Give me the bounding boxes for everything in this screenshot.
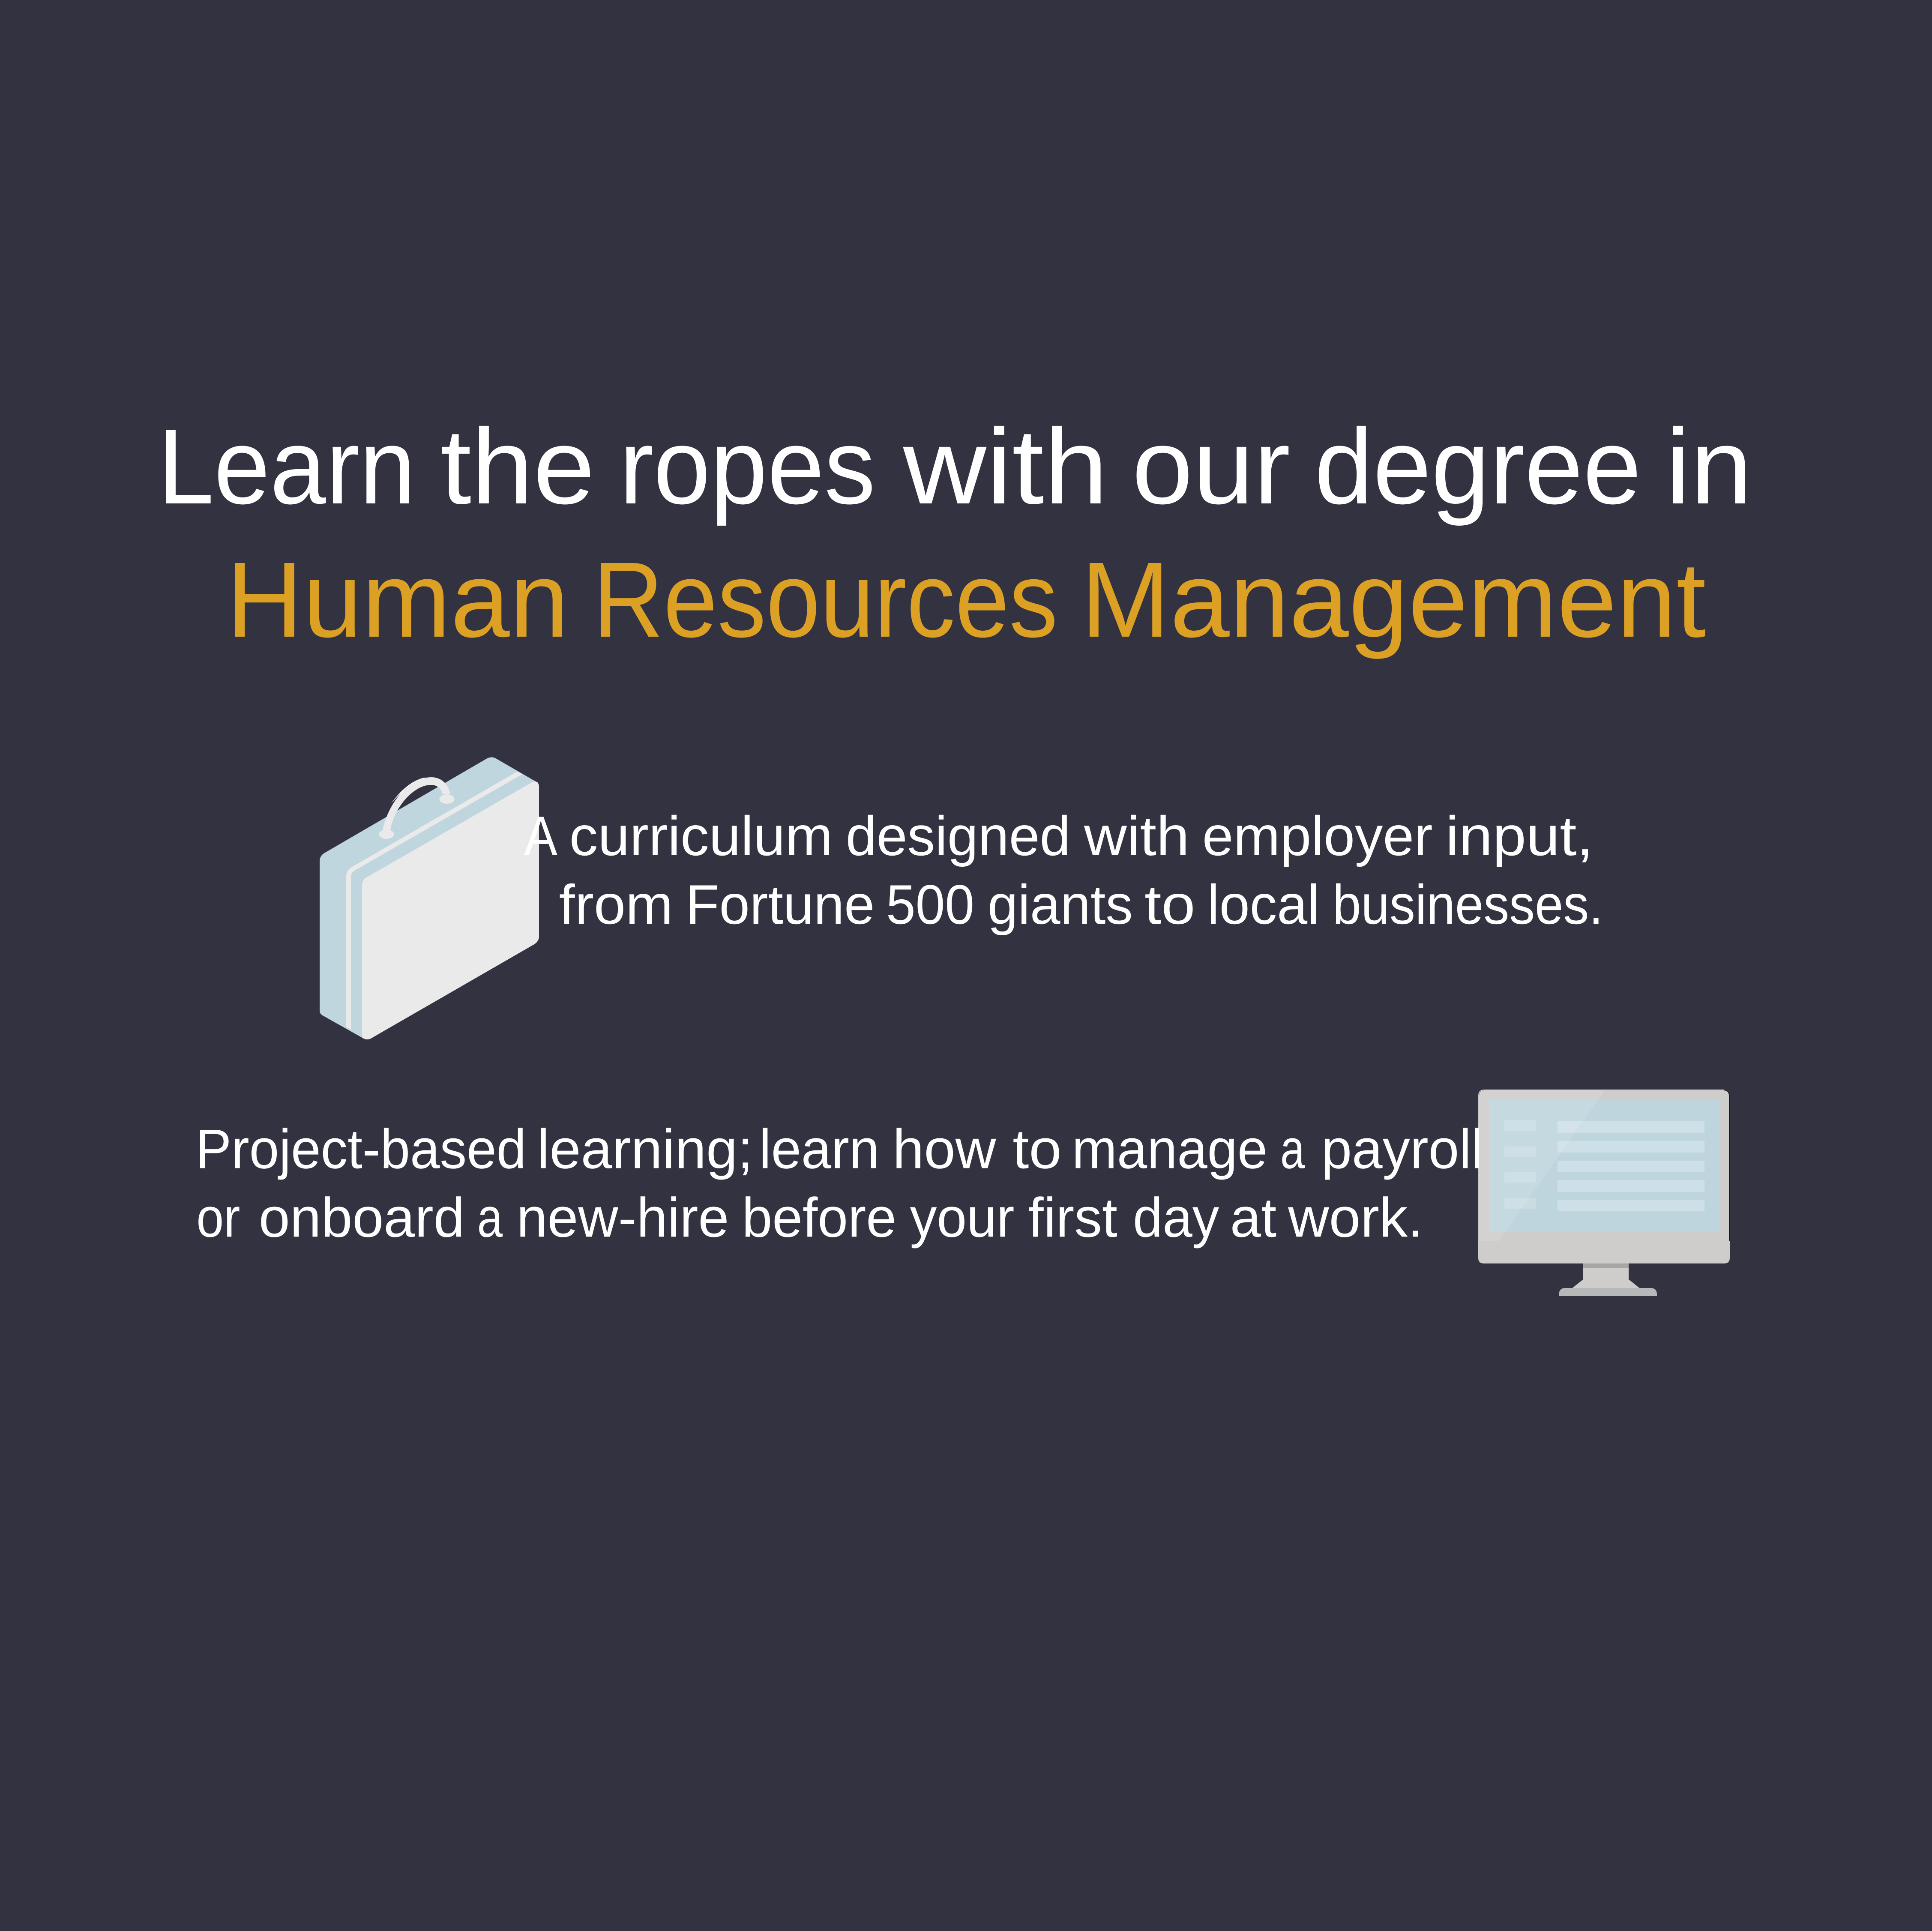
text block: project-based learning: how: [893, 1117, 997, 1180]
text block: project-based learning: Project-based: [196, 1117, 526, 1180]
title line: white: with: [903, 407, 1108, 526]
text block: curriculum: designed: [846, 805, 1070, 867]
text block: curriculum: with: [1084, 805, 1189, 867]
text block: project-based learning: [196, 1117, 1484, 1248]
screen glare: [1479, 1090, 1605, 1241]
text block: project-based learning: payroll: [1321, 1117, 1483, 1180]
title: [158, 407, 1752, 659]
briefcase stripe: [346, 772, 522, 1030]
text block: curriculum: from: [559, 873, 673, 936]
title line: white: ropes: [620, 407, 875, 526]
text block: curriculum: 500: [886, 873, 974, 936]
text block: project-based learning: onboard: [259, 1186, 465, 1248]
text block: curriculum: local: [1207, 873, 1320, 936]
briefcase handle: [379, 777, 454, 839]
text block: curriculum: to: [1144, 873, 1195, 936]
text block: project-based learning: a: [1280, 1117, 1305, 1180]
text block: curriculum: employer: [1202, 805, 1433, 867]
monitor base: [1559, 1288, 1657, 1296]
text block: curriculum: A: [524, 805, 557, 867]
icon: briefcase: [320, 757, 539, 1039]
briefcase front panel: [362, 781, 539, 1039]
text block: curriculum: Fortune: [686, 873, 875, 936]
text block: project-based learning: or: [196, 1186, 240, 1248]
title line: gold: Management: [1081, 540, 1706, 659]
text block: project-based learning: at: [1230, 1186, 1276, 1248]
text block: project-based learning: new-hire: [517, 1186, 729, 1248]
text block: project-based learning: manage: [1072, 1117, 1267, 1180]
monitor bezel: [1479, 1090, 1729, 1241]
title line: white: the: [440, 407, 595, 526]
screen rows: left: [1504, 1120, 1536, 1209]
title line: gold: Resources: [593, 540, 1058, 659]
monitor chin: [1478, 1241, 1730, 1263]
monitor neck: [1573, 1263, 1639, 1288]
neck shadow: [1583, 1263, 1629, 1268]
text block: project-based learning: day: [1133, 1186, 1219, 1248]
text block: project-based learning: a: [477, 1186, 503, 1248]
title line: white: our: [1132, 407, 1290, 526]
text block: curriculum: [524, 805, 1603, 936]
text block: project-based learning: first: [1028, 1186, 1117, 1248]
text block: curriculum: curriculum: [569, 805, 833, 867]
title line: white: Learn: [158, 407, 416, 526]
text block: curriculum: input,: [1446, 805, 1594, 867]
text block: project-based learning: learn: [759, 1117, 879, 1180]
text block: project-based learning: your: [910, 1186, 1015, 1248]
text block: project-based learning: work.: [1288, 1186, 1423, 1248]
monitor edge lines: [1479, 1090, 1724, 1241]
text block: project-based learning: learning;: [537, 1117, 753, 1180]
title line: gold: [226, 540, 1706, 659]
title line: gold: Human: [226, 540, 569, 659]
title line: white: degree: [1315, 407, 1641, 526]
briefcase body: [320, 757, 539, 1039]
text block: project-based learning: to: [1012, 1117, 1062, 1180]
title line: white: in: [1666, 407, 1752, 526]
text block: curriculum: businesses.: [1333, 873, 1603, 936]
text block: curriculum: giants: [988, 873, 1133, 936]
monitor screen: [1489, 1100, 1720, 1232]
screen rows: right: [1558, 1121, 1704, 1211]
text block: project-based learning: before: [742, 1186, 896, 1248]
title line: white: [158, 407, 1752, 526]
icon: desktop monitor: [1478, 1090, 1730, 1296]
